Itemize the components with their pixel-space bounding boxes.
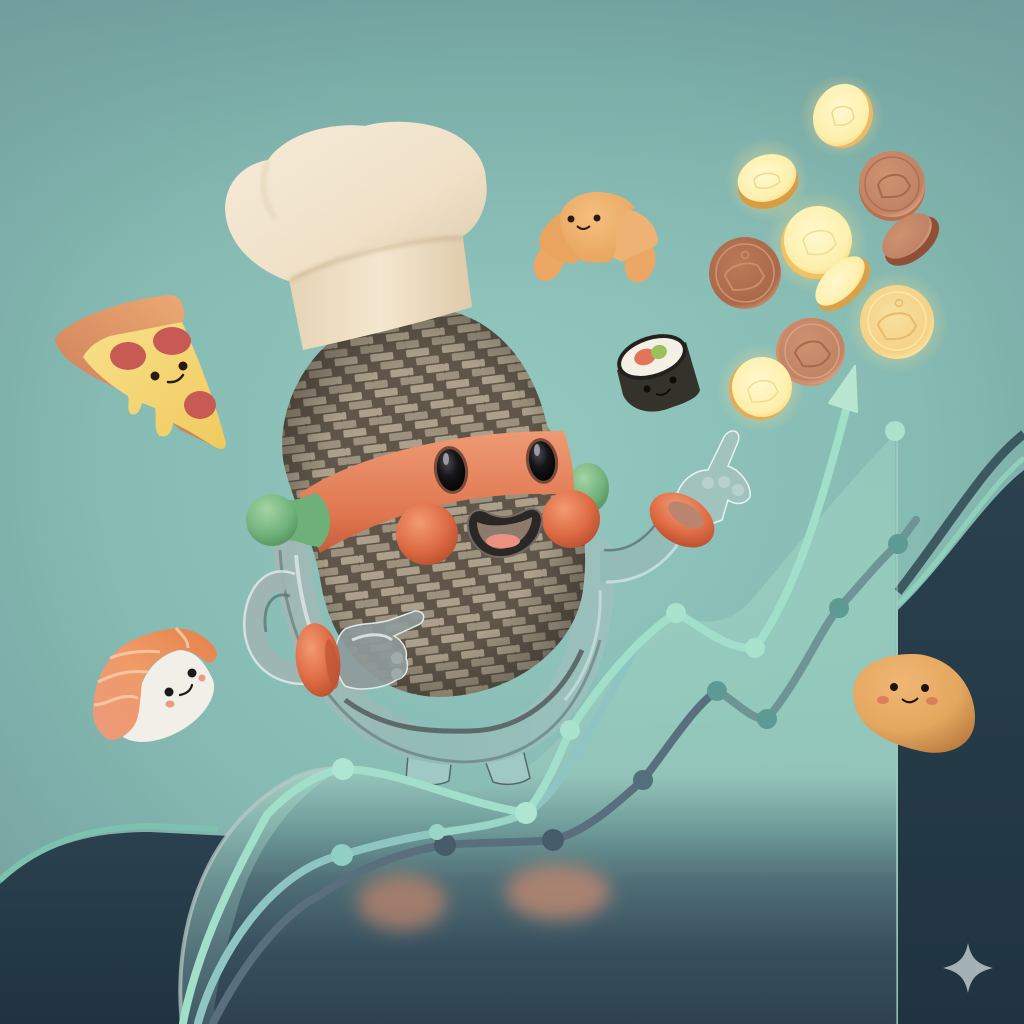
pizza crust	[55, 295, 184, 395]
bread bun	[853, 654, 975, 753]
green ear left	[246, 493, 330, 547]
gold coin edge	[807, 248, 879, 320]
blurred feet reflections	[358, 864, 610, 930]
copper coin upper right	[859, 151, 925, 221]
salmon nigiri	[93, 628, 217, 742]
left cuff and hand	[291, 611, 424, 700]
mouth	[468, 509, 542, 557]
chef hat	[225, 122, 487, 350]
glass U stand	[280, 540, 600, 762]
gold coin bottom	[729, 357, 792, 420]
coins	[709, 74, 949, 432]
hat band	[288, 230, 472, 350]
sparkle watermark	[943, 943, 993, 993]
glass arm left	[244, 571, 305, 684]
copper coin left	[709, 237, 781, 309]
eyes	[431, 436, 561, 496]
dark hill left	[0, 826, 230, 1024]
glass chart panel	[180, 434, 897, 1024]
gold coin tilted	[731, 146, 805, 217]
arrow head	[829, 366, 857, 412]
pizza cheese	[83, 322, 226, 449]
orange headband	[299, 431, 574, 553]
hat cap	[225, 122, 487, 281]
microphone character	[225, 122, 750, 785]
copper coin tilted	[874, 204, 948, 275]
line chart: blue-teal line	[198, 640, 640, 1023]
sushi roll	[611, 326, 700, 412]
dark hill right	[898, 434, 1024, 1024]
glass legs	[406, 745, 530, 785]
green ear right	[567, 463, 609, 513]
gold coin right	[860, 285, 934, 359]
glass arm right	[600, 524, 682, 582]
gold coin center	[781, 206, 852, 279]
croissant	[528, 192, 660, 286]
line chart: mint line	[183, 410, 905, 1023]
line chart: dark line	[213, 520, 916, 1023]
copper coin lower	[776, 318, 845, 386]
mesh head	[282, 308, 585, 697]
coin glows	[717, 74, 949, 432]
pizza slice	[55, 295, 226, 450]
gold coin top	[803, 75, 883, 157]
cheeks	[396, 490, 600, 565]
right cuff and hand	[640, 431, 750, 559]
